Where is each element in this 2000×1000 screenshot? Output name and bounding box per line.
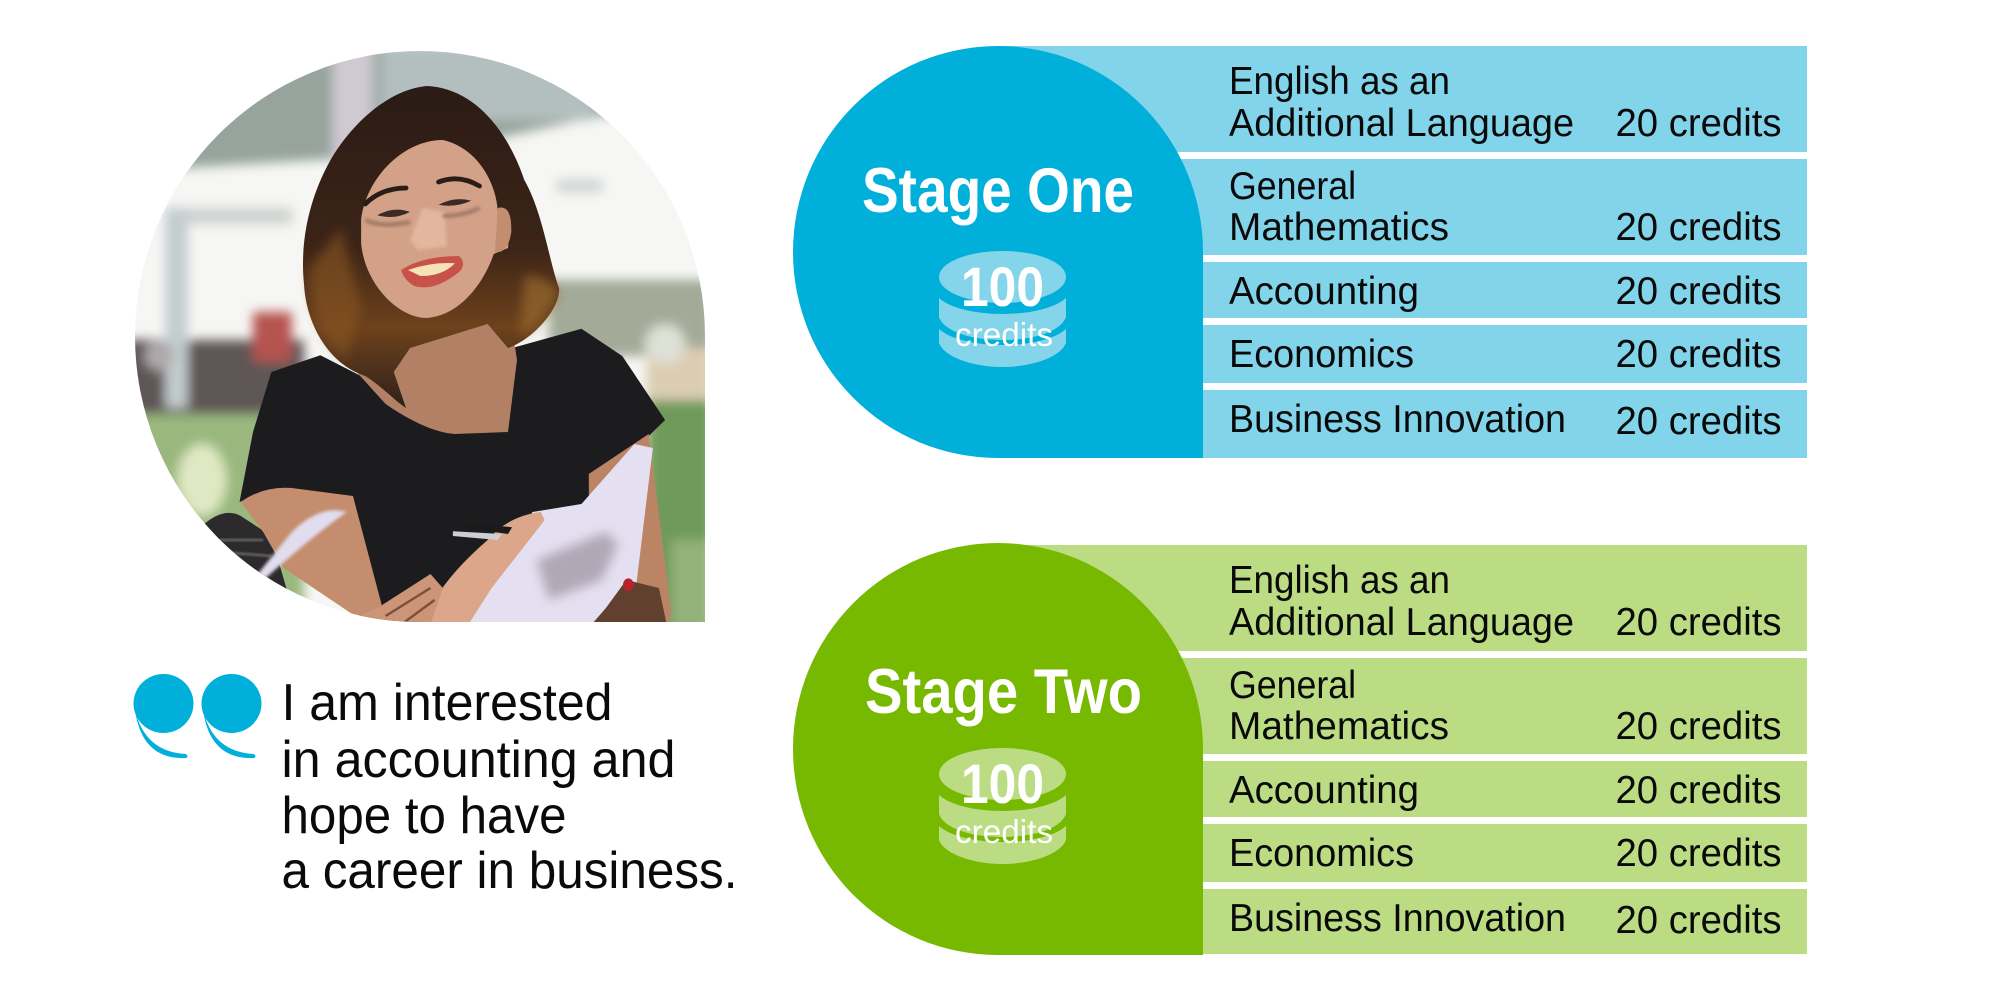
credit total: stage two: credits [955,813,1053,850]
subject list: stage two: 20 credits [1616,832,1782,875]
heading: stage one: Stage One [862,156,1134,226]
right arm [589,434,671,636]
credit total: stage two: 100 [961,752,1044,815]
subject list: stage two [1229,559,1782,942]
subject list: stage one: 20 credits [1616,400,1782,443]
shirt [240,329,665,636]
subject list: stage two: 20 credits [1616,705,1782,748]
subject list: stage two: General [1229,664,1356,707]
credit total: stage two [955,752,1053,850]
subject list: stage one: Business Innovation [1229,398,1566,441]
paper [470,444,653,622]
subject list: stage one: General [1229,165,1356,208]
face [361,140,510,318]
subject rows: stage one [1000,46,1807,458]
subject list: stage two: English as an [1229,559,1450,602]
subject list: stage one: Economics [1229,333,1414,376]
credit total: stage one: credits [955,316,1053,353]
heading: stage two: Stage Two [865,657,1142,727]
quote text: hope to have [282,787,566,845]
subject list: stage one: Mathematics [1229,206,1449,249]
subject list: stage one: 20 credits [1616,333,1782,376]
stage one badge [793,46,1203,458]
subject list: stage two: 20 credits [1616,769,1782,812]
quote text: a career in business. [282,842,738,900]
credit total: stage one [955,255,1053,353]
icon: credit stack stage two [939,748,1066,864]
bag [205,512,286,589]
subject list: stage two: Economics [1229,832,1414,875]
quote mark [134,674,262,758]
subject list: stage one: 20 credits [1616,206,1782,249]
subject list: stage one: Accounting [1229,270,1419,313]
subject list: stage two: Business Innovation [1229,897,1566,940]
subject list: stage two: Mathematics [1229,705,1449,748]
subject rows: stage two [1000,545,1807,954]
neck [357,324,517,434]
credit total: stage one: 100 [961,255,1044,318]
quote text [282,674,738,900]
subject list: stage one: 20 credits [1616,270,1782,313]
quote text: I am interested [282,674,612,732]
subject list: stage two: Additional Language [1229,601,1574,644]
subject list: stage two: Accounting [1229,769,1419,812]
left arm [241,488,384,620]
panel: stage one [793,46,1807,458]
subject list: stage two: 20 credits [1616,601,1782,644]
hair [303,86,559,408]
photo: smiling student holding papers [124,44,712,638]
subject list: stage one: 20 credits [1616,102,1782,145]
panel: stage two [793,543,1807,955]
subject list: stage two: 20 credits [1616,899,1782,942]
stage two badge [793,543,1203,955]
subject list: stage one: English as an [1229,60,1450,103]
icon: credit stack stage one [939,251,1066,367]
quote text: in accounting and [282,731,676,789]
subject list: stage one [1229,60,1782,443]
hands [431,512,545,622]
subject list: stage one: Additional Language [1229,102,1574,145]
